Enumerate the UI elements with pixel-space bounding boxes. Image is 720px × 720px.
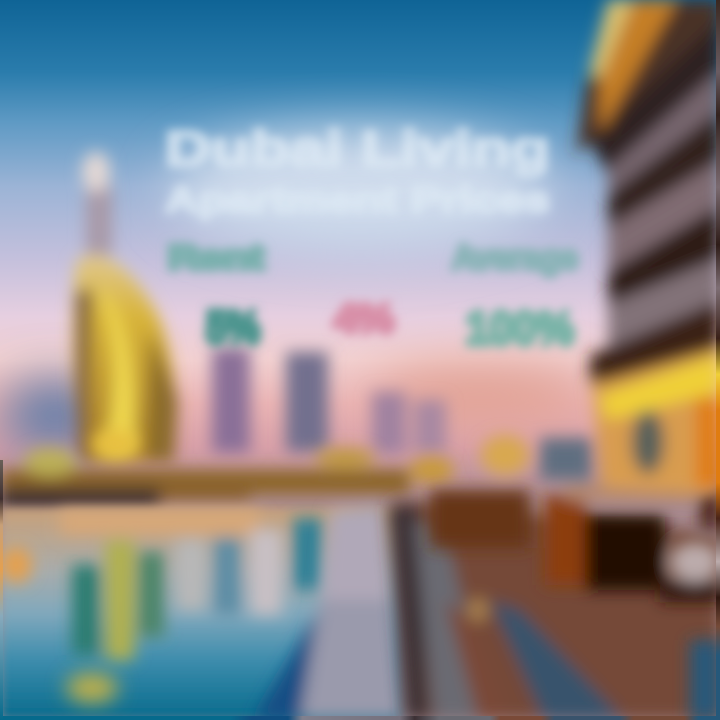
skyline: distant towers [212,348,446,454]
shoreline lights [0,430,454,510]
stat label right: Average [452,239,578,277]
landmark tower [74,152,178,462]
headline block [165,121,550,220]
horizon haze [0,130,590,450]
hotel building [481,0,720,495]
terrace furniture [430,482,720,720]
water reflection [0,508,400,720]
stat label left: Rent [168,239,264,277]
headline line one: Dubai Living [165,121,550,177]
stat value centre: 4% [334,297,394,341]
headline line two: Apartment Prices [165,179,550,220]
deck and railing [388,500,720,720]
stat value left: 5% [206,301,260,353]
stat value right: 100% [466,302,574,354]
walkway [254,505,406,720]
